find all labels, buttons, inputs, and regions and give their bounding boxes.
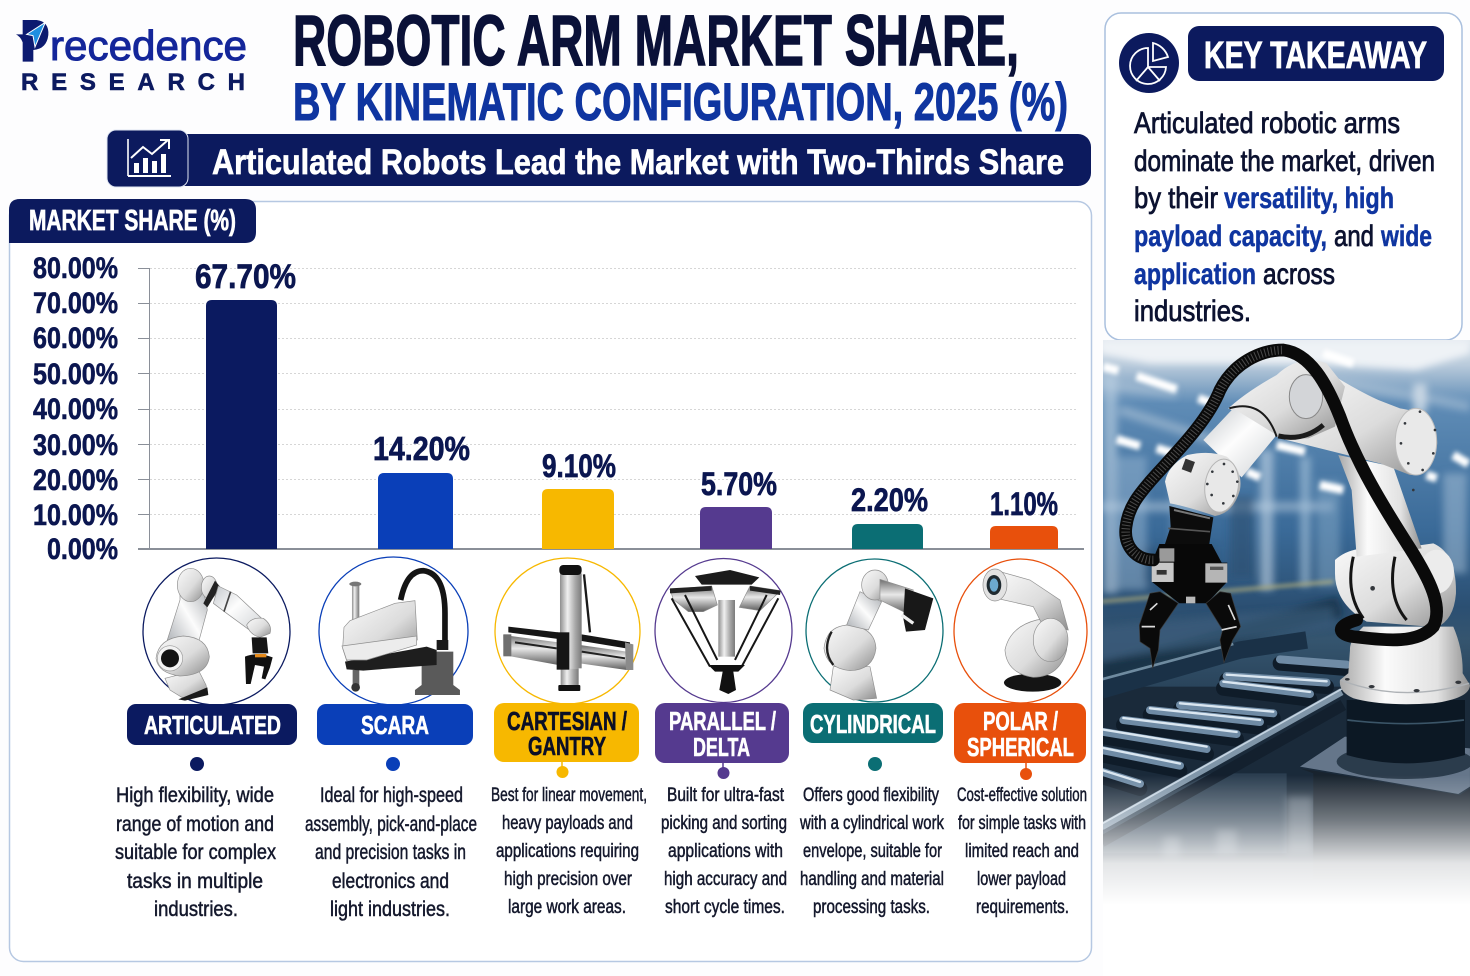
description: cylindrical: processing tasks.: [813, 897, 930, 918]
icon: pie chart badge: [1119, 33, 1179, 93]
description: cartesian: heavy payloads and: [502, 813, 633, 834]
marker dot: [718, 762, 730, 779]
description: scara: [305, 784, 477, 921]
logo: Precedence Research: [16, 20, 247, 96]
y axis labels: [33, 252, 118, 566]
takeaway text: application: [1134, 258, 1256, 291]
description: parallel: short cycle times.: [665, 897, 785, 918]
headline banner: Articulated Robots Lead the Market with Two-Thirds Share: [212, 143, 1064, 182]
label: scara: [317, 704, 473, 745]
label: cylindrical: CYLINDRICAL: [810, 709, 936, 739]
icon: cartesian robot: [495, 558, 640, 704]
cable: [1126, 350, 1437, 640]
takeaway text: versatility, high: [1224, 182, 1394, 215]
description: scara: light industries.: [330, 898, 450, 921]
conveyor rollers and pedestal: [1103, 632, 1470, 854]
label: cartesian / gantry: CARTESIAN /: [507, 706, 627, 736]
takeaway text: wide: [1380, 220, 1432, 253]
bars and values: 5.70%: [701, 466, 777, 502]
description: articulated: tasks in multiple: [127, 870, 263, 893]
description: cylindrical: handling and material: [800, 869, 944, 890]
description: cylindrical: envelope, suitable for: [803, 841, 943, 862]
icon: delta robot: [655, 558, 792, 702]
white base of fade: [1103, 905, 1470, 976]
marker dot: [190, 757, 204, 771]
description: polar: limited reach and: [965, 841, 1079, 862]
description: parallel: high accuracy and: [664, 869, 787, 890]
y axis labels: 70.00%: [33, 287, 118, 320]
marker dot: [1020, 762, 1032, 780]
heading tab: market share: MARKET SHARE (%): [29, 205, 236, 237]
takeaway text: Articulated robotic arms: [1134, 107, 1400, 140]
title: ROBOTIC ARM MARKET SHARE,: [293, 2, 1019, 81]
y axis labels: 80.00%: [33, 252, 118, 285]
takeaway text: by their: [1134, 182, 1218, 215]
icon: polar robot: [954, 559, 1087, 703]
label: scara: SCARA: [361, 710, 429, 740]
description: cartesian: applications requiring: [496, 841, 639, 862]
icon: scara robot: [319, 557, 468, 705]
description: articulated: industries.: [154, 898, 238, 921]
description: scara: Ideal for high-speed: [320, 784, 463, 807]
description: parallel: Built for ultra-fast: [667, 785, 785, 806]
description: cartesian: Best for linear movement,: [491, 785, 647, 806]
column: polar / spherical: [954, 559, 1087, 918]
panel: key takeaway: [1105, 13, 1462, 340]
icon: cylindrical robot: [806, 559, 943, 702]
y axis labels: 60.00%: [33, 322, 118, 355]
arm body: [1335, 543, 1456, 627]
robot arm: [1126, 350, 1470, 704]
label: cartesian / gantry: GANTRY: [528, 731, 606, 761]
subtitle: BY KINEMATIC CONFIGURATION, 2025 (%): [293, 73, 1068, 132]
panel: market share chart: [9, 199, 1092, 962]
marker dot: [868, 757, 882, 771]
description: polar: [957, 785, 1087, 918]
takeaway text: [1134, 107, 1435, 328]
column: parallel / delta: [655, 558, 792, 918]
y axis labels: 40.00%: [33, 393, 118, 426]
label: parallel / delta: [655, 703, 789, 763]
photo: robotic arm in factory: [1103, 340, 1470, 890]
description: scara: and precision tasks in: [315, 841, 466, 864]
factory background lights: [1100, 340, 1470, 673]
takeaway text: payload capacity,: [1134, 220, 1327, 253]
description: cartesian: high precision over: [504, 869, 633, 890]
description: parallel: applications with: [668, 841, 783, 862]
logo: Precedence Research: RESEARCH: [21, 69, 245, 96]
label: parallel / delta: DELTA: [693, 732, 750, 762]
y axis labels: 30.00%: [33, 429, 118, 462]
description: scara: assembly, pick-and-place: [305, 813, 477, 836]
column: cartesian / gantry: [491, 558, 647, 918]
bar chart: [33, 252, 1084, 566]
description: polar: lower payload: [977, 869, 1066, 890]
column: articulated: [115, 558, 297, 921]
description: parallel: picking and sorting: [661, 813, 787, 834]
description: articulated: High flexibility, wide: [116, 784, 274, 807]
bars and values: 67.70%: [195, 258, 296, 296]
label: polar / spherical: SPHERICAL: [967, 732, 1074, 762]
description: scara: electronics and: [332, 870, 449, 893]
icon: articulated robot: [143, 558, 290, 705]
marker dot: [386, 757, 400, 771]
description: cartesian: large work areas.: [508, 897, 626, 918]
label: parallel / delta: PARALLEL /: [669, 706, 776, 736]
description: cartesian: [491, 785, 647, 918]
icon: growth chart: [107, 130, 188, 187]
description: parallel: [661, 785, 787, 918]
y axis labels: 20.00%: [33, 464, 118, 497]
description: polar: Cost-effective solution: [957, 785, 1087, 806]
column: cylindrical: [799, 559, 944, 918]
label: cylindrical: [803, 703, 943, 743]
column: scara: [305, 557, 477, 921]
bottom fade: [1103, 775, 1470, 905]
bars and values: 2.20%: [851, 482, 928, 518]
y axis labels: 0.00%: [47, 533, 118, 566]
description: articulated: suitable for complex: [115, 841, 276, 864]
label: cartesian / gantry: [494, 703, 639, 762]
description: articulated: range of motion and: [116, 813, 274, 836]
bars and values: 1.10%: [990, 486, 1058, 522]
y axis labels: 10.00%: [33, 499, 118, 532]
description: polar: for simple tasks with: [958, 813, 1086, 834]
heading tab: market share: [9, 199, 256, 243]
bars and values: [195, 258, 1058, 549]
description: polar: requirements.: [976, 897, 1069, 918]
bars and values: 9.10%: [542, 448, 616, 484]
description: cylindrical: with a cylindrical work: [799, 813, 944, 834]
label: articulated: [127, 704, 297, 745]
takeaway text: across: [1263, 258, 1335, 291]
description: articulated: [115, 784, 276, 921]
takeaway text: and: [1334, 220, 1374, 253]
label: polar / spherical: [954, 703, 1086, 763]
y axis labels: 50.00%: [33, 358, 118, 391]
headline banner: [107, 130, 1091, 187]
base: [1340, 627, 1470, 704]
logo: Precedence Research: recedence: [50, 22, 247, 69]
takeaway text: industries.: [1134, 295, 1251, 328]
title: [293, 2, 1068, 132]
marker dot: [556, 760, 568, 778]
label: polar / spherical: POLAR /: [983, 706, 1058, 736]
description: cylindrical: [799, 785, 944, 918]
description: cylindrical: Offers good flexibility: [803, 785, 939, 806]
label: articulated: ARTICULATED: [144, 710, 281, 740]
heading: key takeaway: [1188, 26, 1444, 81]
wrist and gripper: [1165, 506, 1213, 544]
bars and values: 14.20%: [373, 430, 470, 467]
